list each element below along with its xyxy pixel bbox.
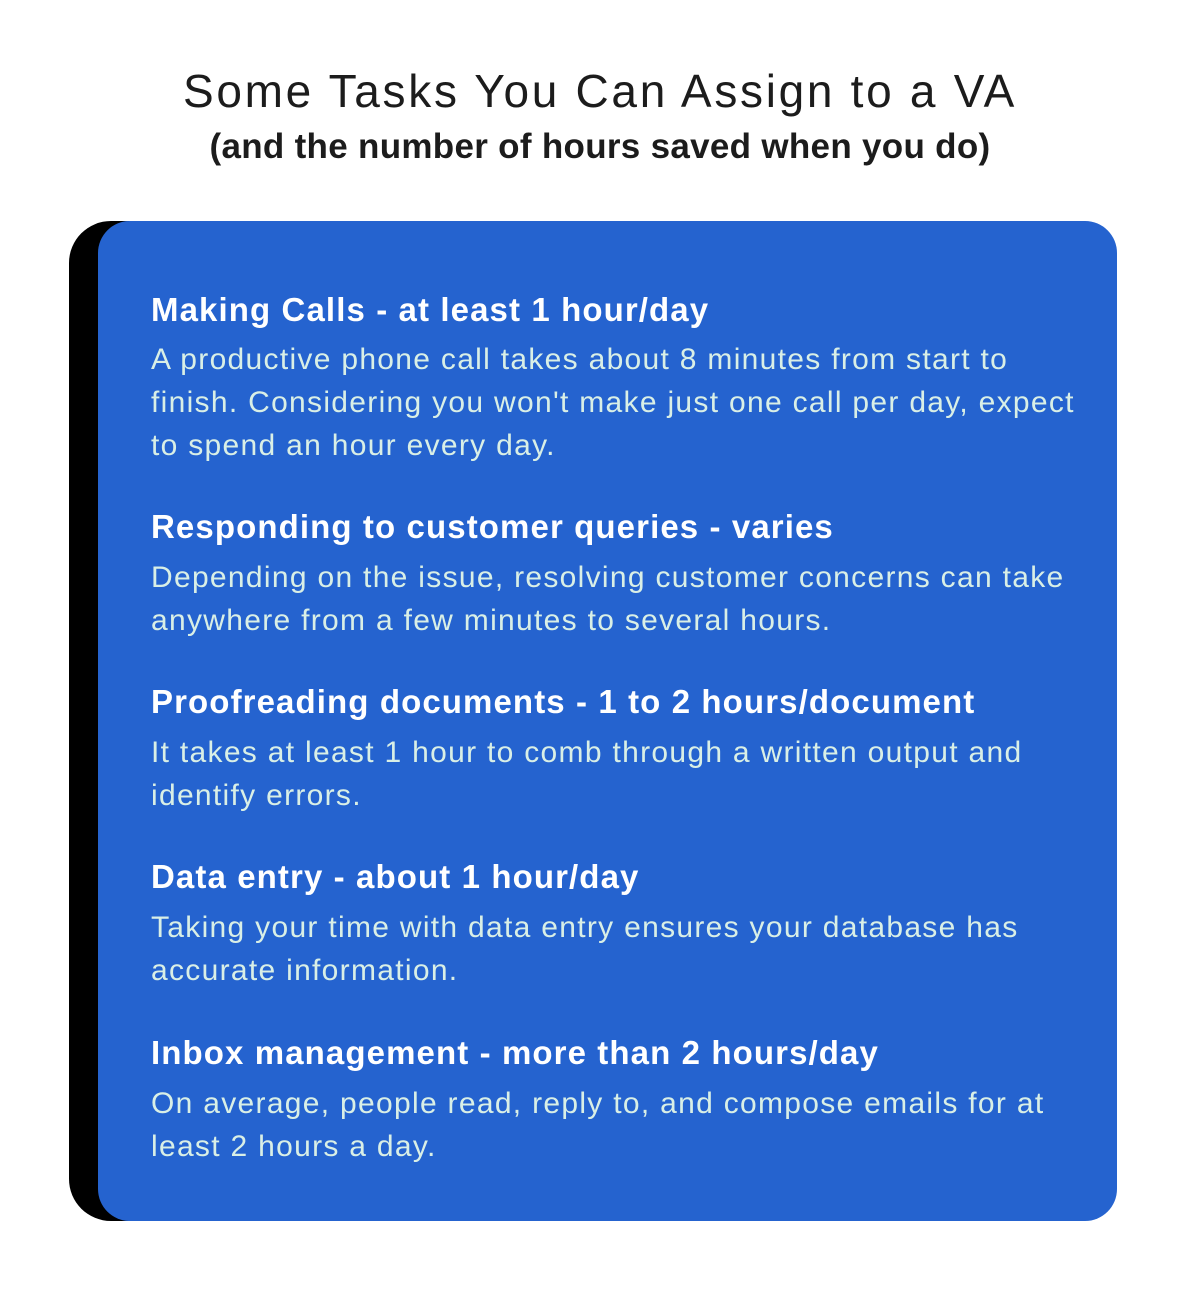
text: proofreading: It takes at least 1 hour to comb through a written output and xyxy=(151,736,1022,769)
heading: making calls: Making Calls - at least 1 hour/day xyxy=(151,291,709,328)
text: inbox: least 2 hours a day. xyxy=(151,1130,437,1163)
text: inbox: On average, people read, reply to, and compose emails for at xyxy=(151,1087,1044,1120)
text: proofreading: identify errors. xyxy=(151,779,362,812)
panel: tasks card xyxy=(98,221,1117,1221)
text: making calls: A productive phone call takes about 8 minutes from start to xyxy=(151,343,1008,376)
text: data entry: Taking your time with data entry ensures your database has xyxy=(151,911,1018,944)
text: proofreading xyxy=(151,736,1022,812)
card shadow xyxy=(69,221,269,1221)
subtitle: (and the number of hours saved when you do) xyxy=(209,127,990,166)
heading: customer queries: Responding to customer queries - varies xyxy=(151,508,834,545)
text: customer queries xyxy=(151,561,1064,637)
text: data entry xyxy=(151,911,1018,987)
text: making calls xyxy=(151,343,1075,462)
heading: inbox: Inbox management - more than 2 hours/day xyxy=(151,1034,879,1071)
heading: proofreading: Proofreading documents - 1 to 2 hours/document xyxy=(151,683,975,720)
text: making calls: finish. Considering you won't make just one call per day, expect xyxy=(151,386,1075,419)
text: customer queries: anywhere from a few minutes to several hours. xyxy=(151,604,831,637)
title: Some Tasks You Can Assign to a VA xyxy=(183,65,1017,117)
text: customer queries: Depending on the issue, resolving customer concerns can take xyxy=(151,561,1064,594)
text: inbox xyxy=(151,1087,1044,1163)
heading: data entry: Data entry - about 1 hour/day xyxy=(151,858,639,895)
text: making calls: to spend an hour every day. xyxy=(151,429,556,462)
text: data entry: accurate information. xyxy=(151,954,458,987)
